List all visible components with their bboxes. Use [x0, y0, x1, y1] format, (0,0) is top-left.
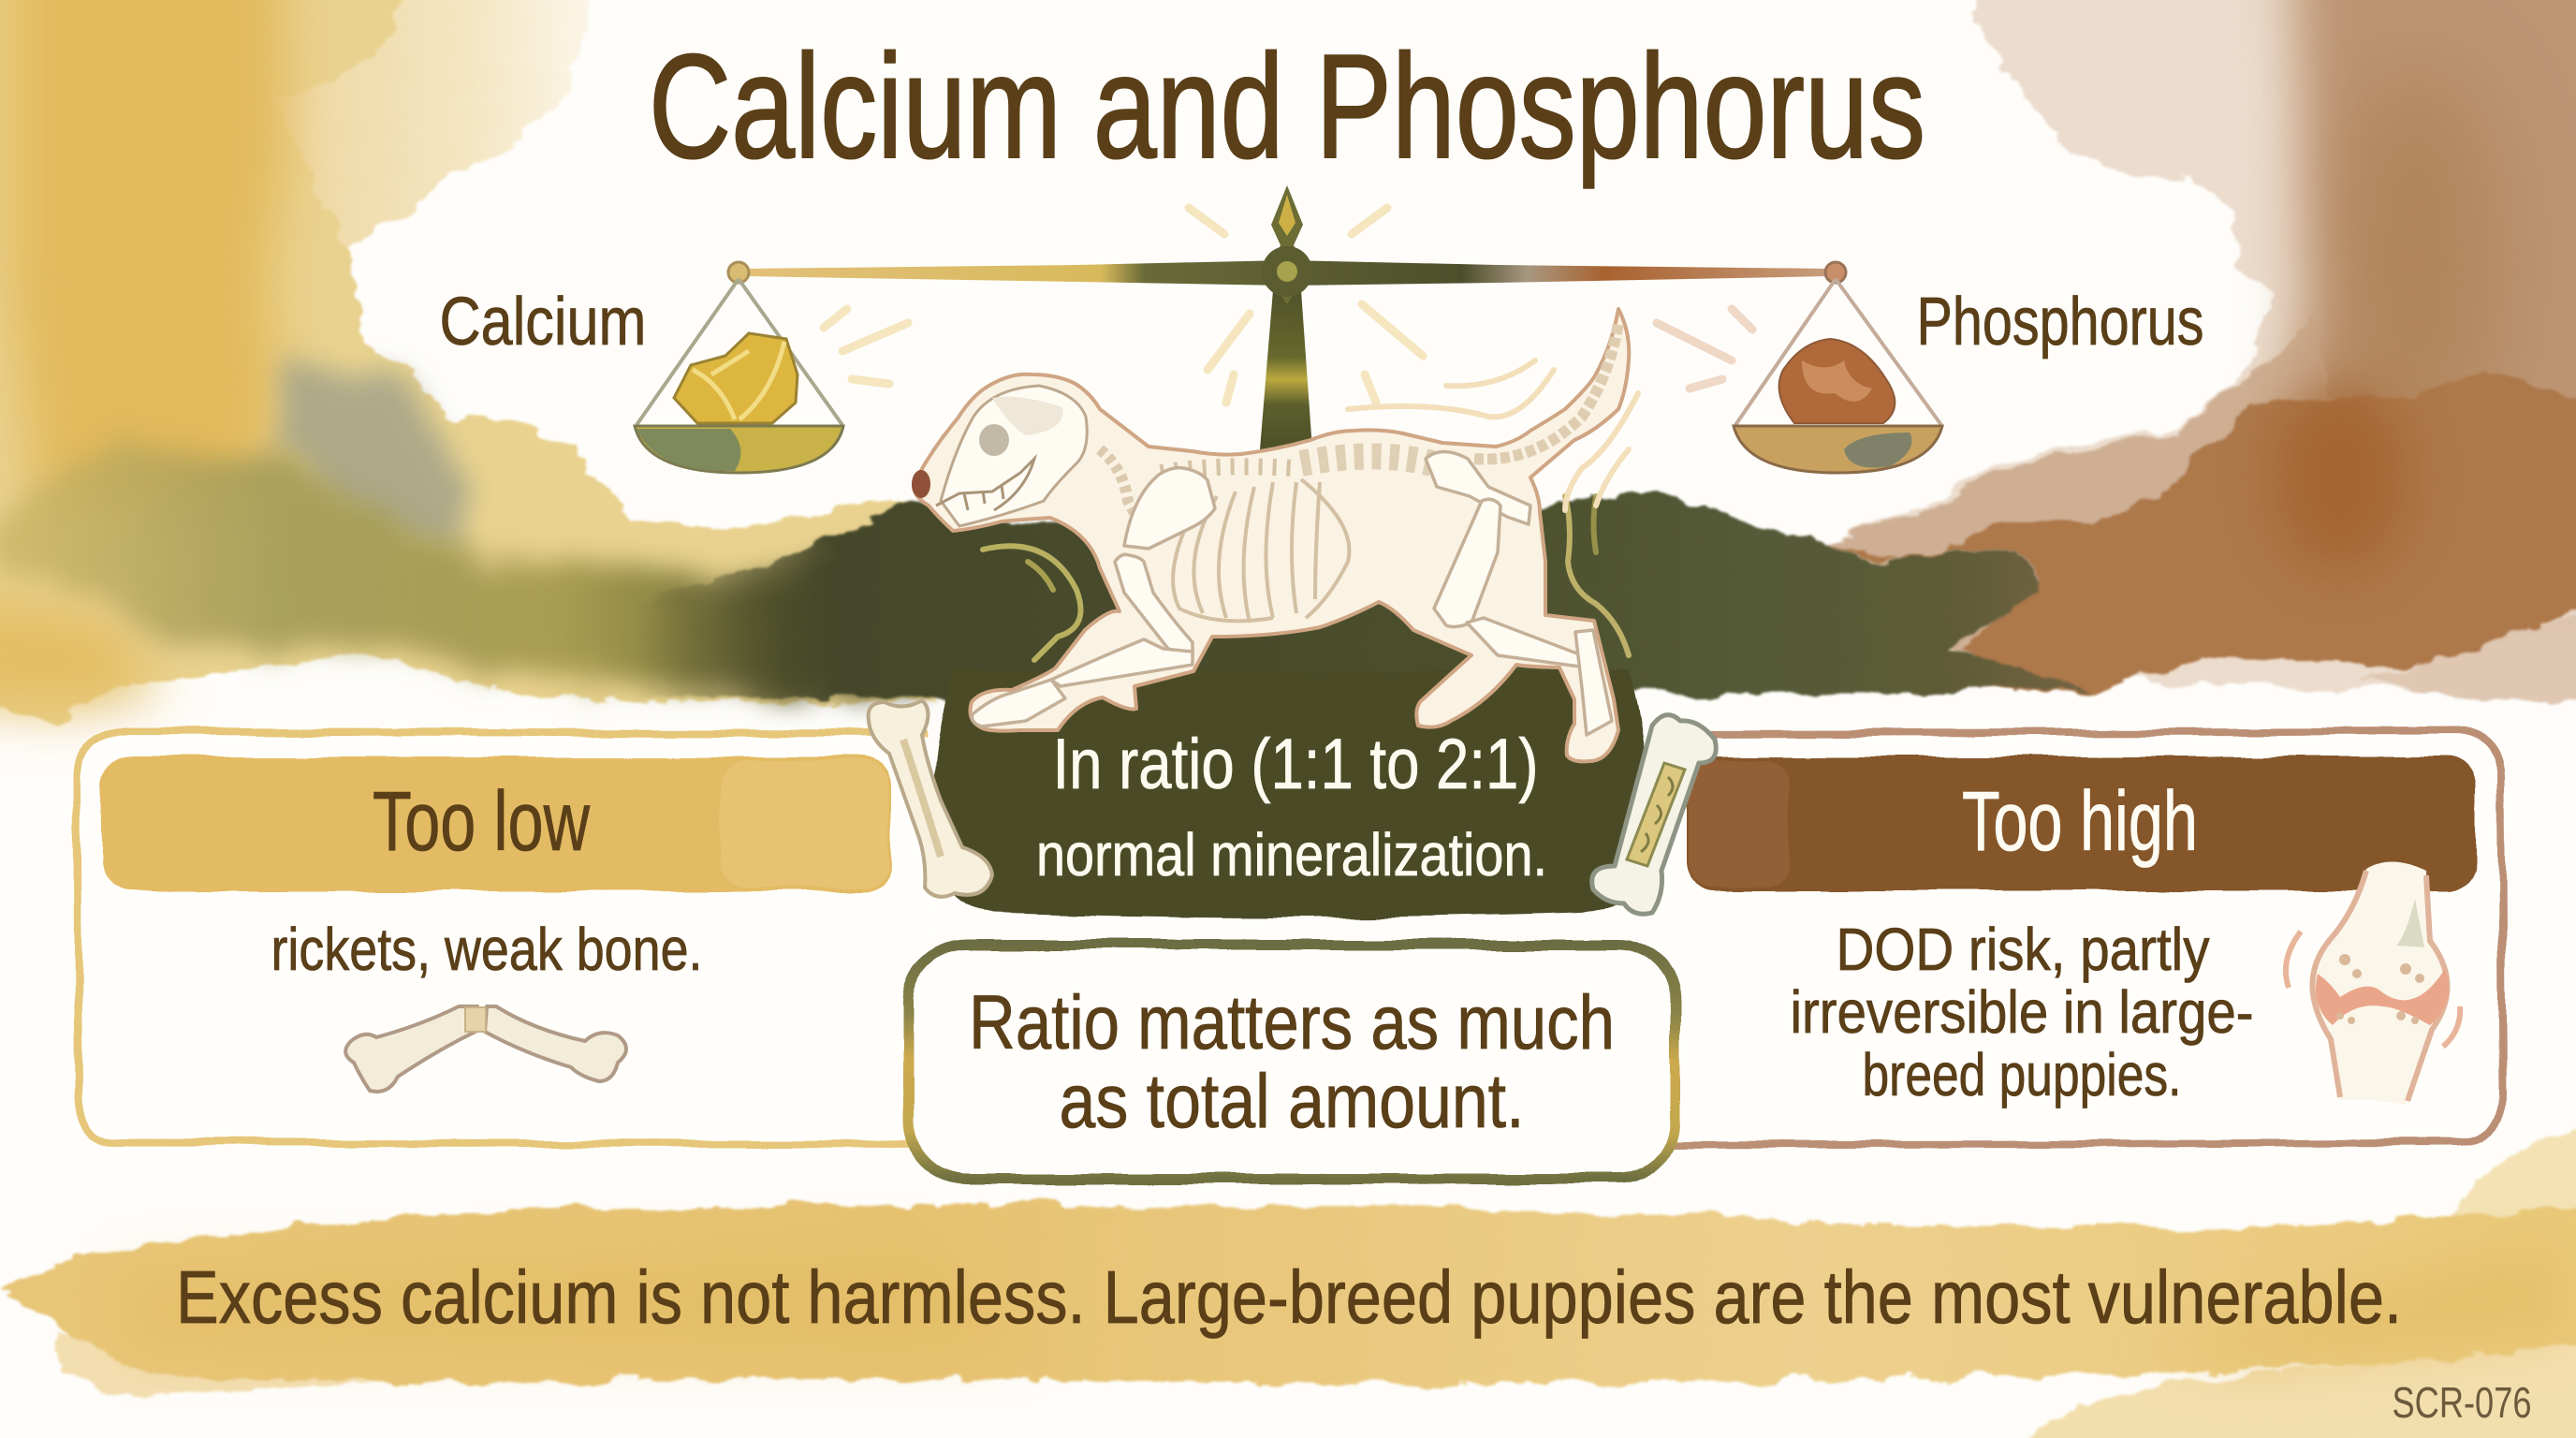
right panel: too high: Too high: [1962, 775, 2198, 869]
watercolor wash: left gold: [0, 0, 936, 723]
neck vertebrae: [1100, 449, 1137, 517]
icon: knee joint: [2286, 861, 2460, 1105]
left panel: too low: Too low: [373, 775, 591, 869]
rib cage: [1173, 479, 1349, 623]
left panel: too low: [77, 731, 945, 1144]
rays around scale: [824, 208, 1752, 403]
balance scale: [635, 185, 1942, 473]
callout: ratio matters: as total amount.: [1060, 1059, 1524, 1144]
center panel: in ratio: normal mineralization.: [1036, 821, 1547, 888]
icon: cross-section bone right: [1592, 715, 1716, 914]
scale post: [1260, 290, 1312, 449]
bottom banner: [0, 1130, 2576, 1438]
center panel: in ratio: In ratio (1:1 to 2:1): [1052, 725, 1539, 804]
dog skeleton illustration: [912, 309, 1638, 761]
label: phosphorus: Phosphorus: [1917, 285, 2203, 360]
scale beam: [744, 260, 1830, 286]
title: Calcium and Phosphorus: [649, 24, 1925, 189]
icon: healthy bone left: [869, 700, 992, 897]
icon: bent bone: [345, 1006, 626, 1092]
too low header: [101, 756, 892, 891]
right pan with phosphorus rock: [1734, 279, 1942, 473]
callout: ratio matters: [908, 945, 1676, 1179]
too low description: rickets, weak bone.: [271, 916, 702, 983]
center panel: in ratio: [932, 670, 1648, 917]
left pan with calcium rock: [635, 279, 843, 473]
label: calcium: Calcium: [440, 285, 646, 360]
right panel: too high: [1647, 731, 2503, 1144]
too high description: DOD risk, partly: [1837, 916, 2209, 983]
nose: [912, 470, 930, 498]
spine: [1161, 466, 1292, 473]
shoulder and limbs: [972, 451, 1612, 735]
callout: ratio matters: Ratio matters as much: [969, 980, 1615, 1065]
dog body: [914, 309, 1629, 761]
too high header: [1685, 756, 2476, 891]
too high description: irreversible in large-: [1790, 978, 2254, 1046]
reference code: SCR-076: [2393, 1378, 2531, 1427]
watercolor wash: dark central band: [637, 493, 2094, 698]
watercolor wash: right brown: [1823, 0, 2576, 700]
too high description: breed puppies.: [1863, 1041, 2181, 1108]
finial and pivot: [1266, 185, 1309, 304]
skull: [941, 386, 1087, 526]
motion lines: [983, 360, 1638, 660]
too high description: [1790, 916, 2254, 1108]
